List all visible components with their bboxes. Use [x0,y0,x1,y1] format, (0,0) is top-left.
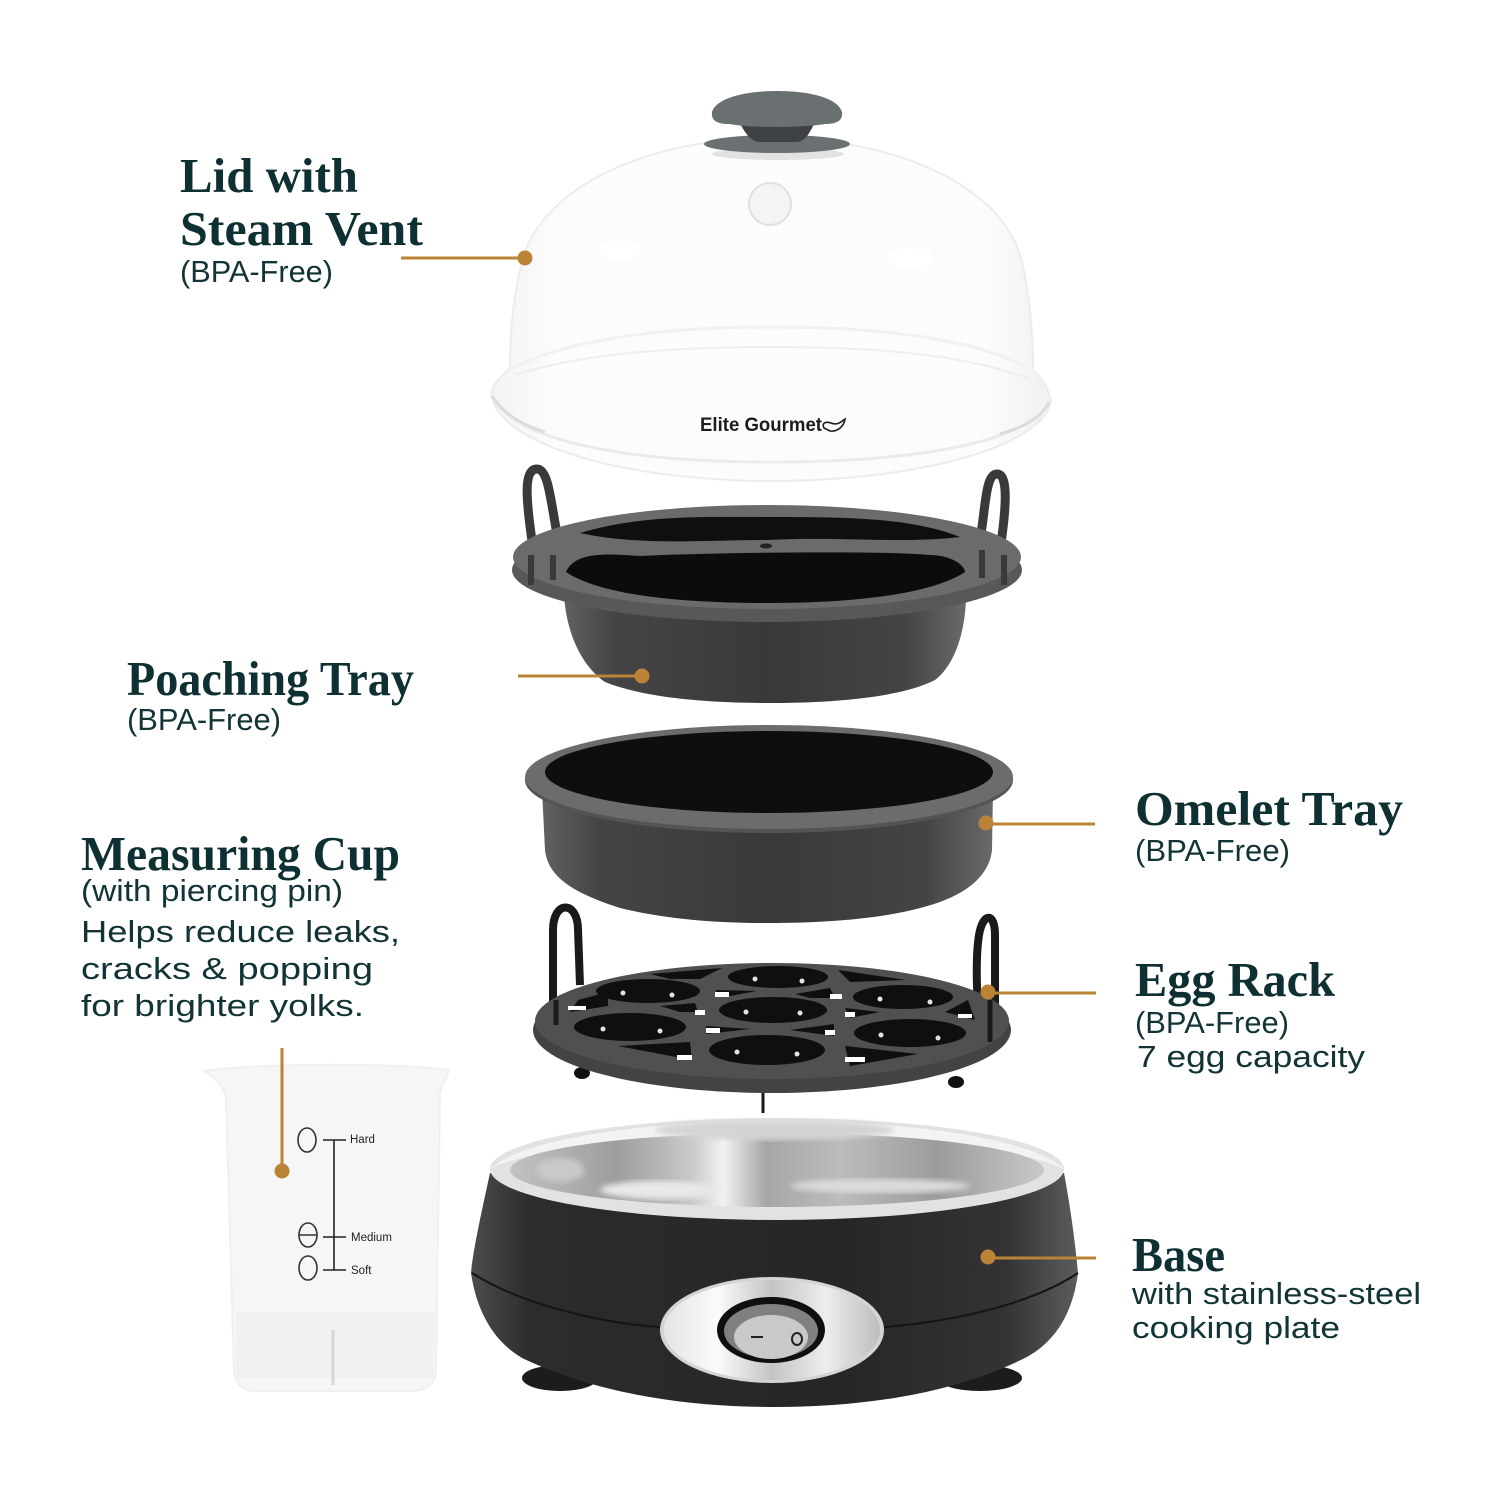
lid logo: Elite Gourmet [700,415,823,436]
label: lid: Lid with [180,148,358,203]
stainless-steel plate [490,1118,1064,1220]
label: poaching tray: Poaching Tray [127,651,414,706]
cup markings: Hard [350,1134,375,1146]
label: lid: (BPA-Free) [180,254,333,289]
egg rack [533,908,1011,1113]
label: lid: Steam Vent [180,201,424,256]
label: omelet tray: (BPA-Free) [1135,833,1290,868]
label: measuring cup: (with piercing pin) [81,873,343,908]
label: egg rack: (BPA-Free) [1135,1005,1289,1040]
label: egg rack: 7 egg capacity [1137,1039,1366,1074]
label: measuring cup: Measuring Cup [81,826,400,881]
poaching tray [512,469,1022,703]
label: lid [180,148,532,289]
label: egg rack: Egg Rack [1135,952,1336,1007]
label: poaching tray: (BPA-Free) [127,702,281,737]
base [471,1118,1078,1407]
label: measuring cup: Helps reduce leaks, [81,914,400,949]
label: omelet tray: Omelet Tray [1135,781,1403,836]
label: poaching tray [127,651,650,737]
cup markings: Medium [351,1232,392,1244]
label: base: Base [1132,1227,1225,1282]
label: base: cooking plate [1132,1310,1340,1345]
label: omelet tray [978,781,1403,868]
cup markings: Soft [351,1265,372,1277]
label: measuring cup [81,826,400,1178]
cup markings [298,1128,392,1280]
label: measuring cup: for brighter yolks. [81,988,364,1023]
label: egg rack [980,952,1366,1074]
measuring cup [204,1065,449,1391]
omelet tray [525,725,1013,923]
lid knob [704,91,850,160]
label: base [980,1227,1421,1345]
power switch [660,1277,884,1383]
label: base: with stainless-steel [1131,1276,1421,1311]
lid with steam vent [491,91,1051,481]
logo leaf mark [823,419,845,431]
label: measuring cup: cracks & popping [81,951,373,986]
